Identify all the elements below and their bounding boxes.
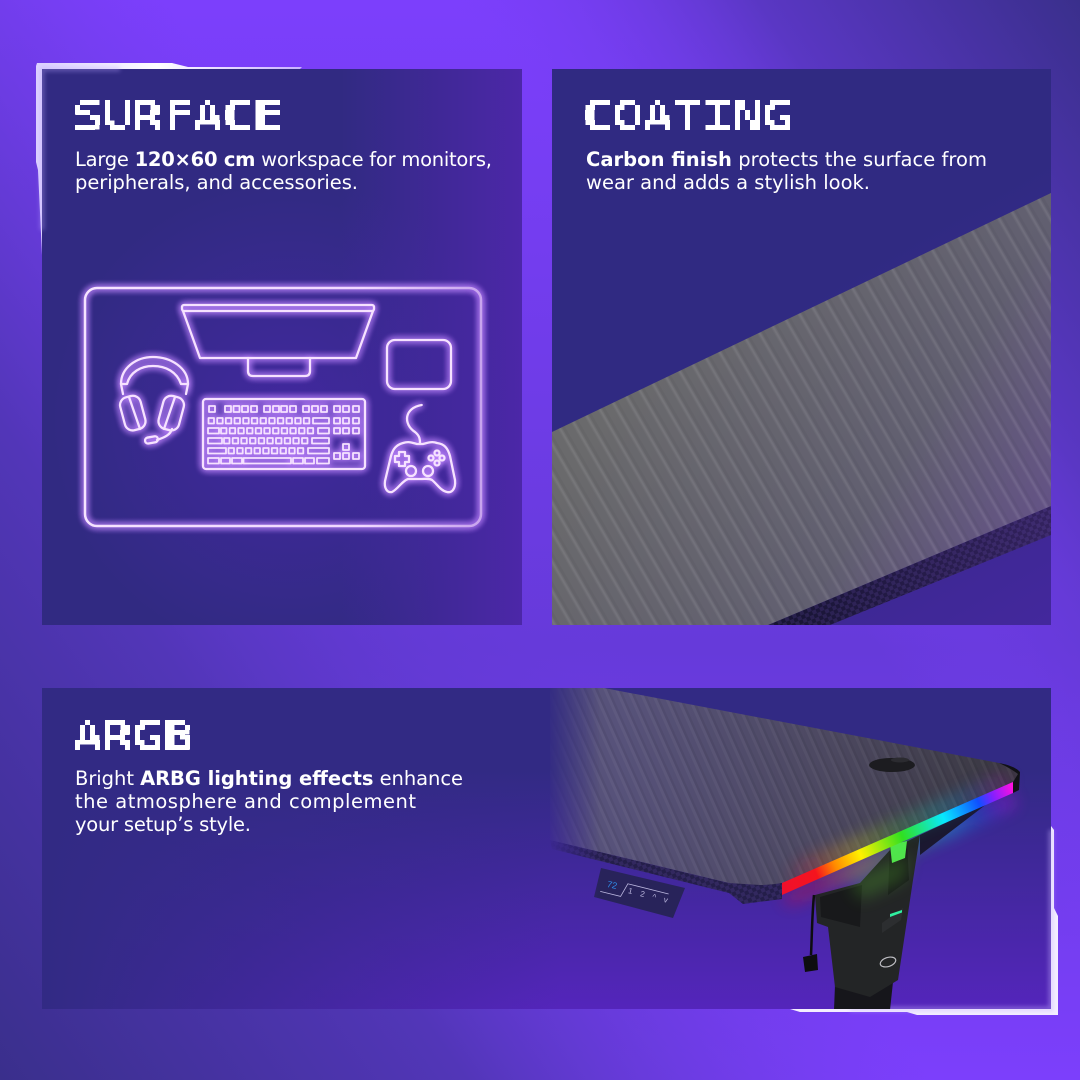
desk top surface (550, 688, 1020, 885)
green strip spill on leg (850, 853, 910, 900)
green light window (890, 841, 907, 863)
heading: SURFACE (74, 93, 282, 140)
description line 3: your setup’s style. (75, 813, 251, 836)
brand logo (880, 956, 896, 968)
icon: keyboard (203, 399, 365, 469)
icon: headset (118, 357, 188, 444)
desk front edge (550, 840, 782, 904)
cable grommet (869, 758, 915, 772)
icon: monitor (182, 305, 374, 376)
RGB gaming desk (550, 688, 1020, 1010)
panel background (42, 69, 522, 625)
icon: game controller (385, 405, 455, 492)
surface reflected glow (790, 778, 1010, 880)
panel keys: 12^v (627, 886, 677, 907)
corner cap (999, 763, 1020, 793)
heading: COATING (584, 93, 792, 140)
description line 2: peripherals, and accessories. (75, 171, 358, 194)
panel display: 72 (606, 879, 618, 891)
icon: mouse pad (387, 340, 451, 389)
panel: coating (552, 69, 1051, 625)
neon desk illustration (85, 288, 481, 526)
desk under-glow (782, 794, 1016, 905)
corner bracket: top left (36, 63, 302, 255)
description line 2: wear and adds a stylish look. (586, 171, 870, 194)
panel: ARGB (42, 688, 1058, 1015)
desk outline (85, 288, 481, 526)
corner bracket: bottom right (790, 826, 1058, 1015)
description: Carbon finish protects the surface from (586, 148, 987, 171)
description: Large 120×60 cm workspace for monitors, (75, 148, 492, 171)
desk leg (815, 803, 988, 1010)
description line 2: the atmosphere and complement (75, 790, 416, 813)
height control panel (594, 868, 685, 918)
power cable (803, 895, 818, 972)
green LED (890, 910, 902, 917)
panel background (552, 69, 1051, 625)
panel: surface (36, 63, 522, 625)
RGB LED strip (782, 782, 1013, 895)
panel background (42, 688, 1051, 1009)
carbon desk surface (552, 193, 1051, 625)
description: Bright ARBG lighting effects enhance (75, 767, 463, 790)
heading: ARGB (74, 713, 192, 760)
